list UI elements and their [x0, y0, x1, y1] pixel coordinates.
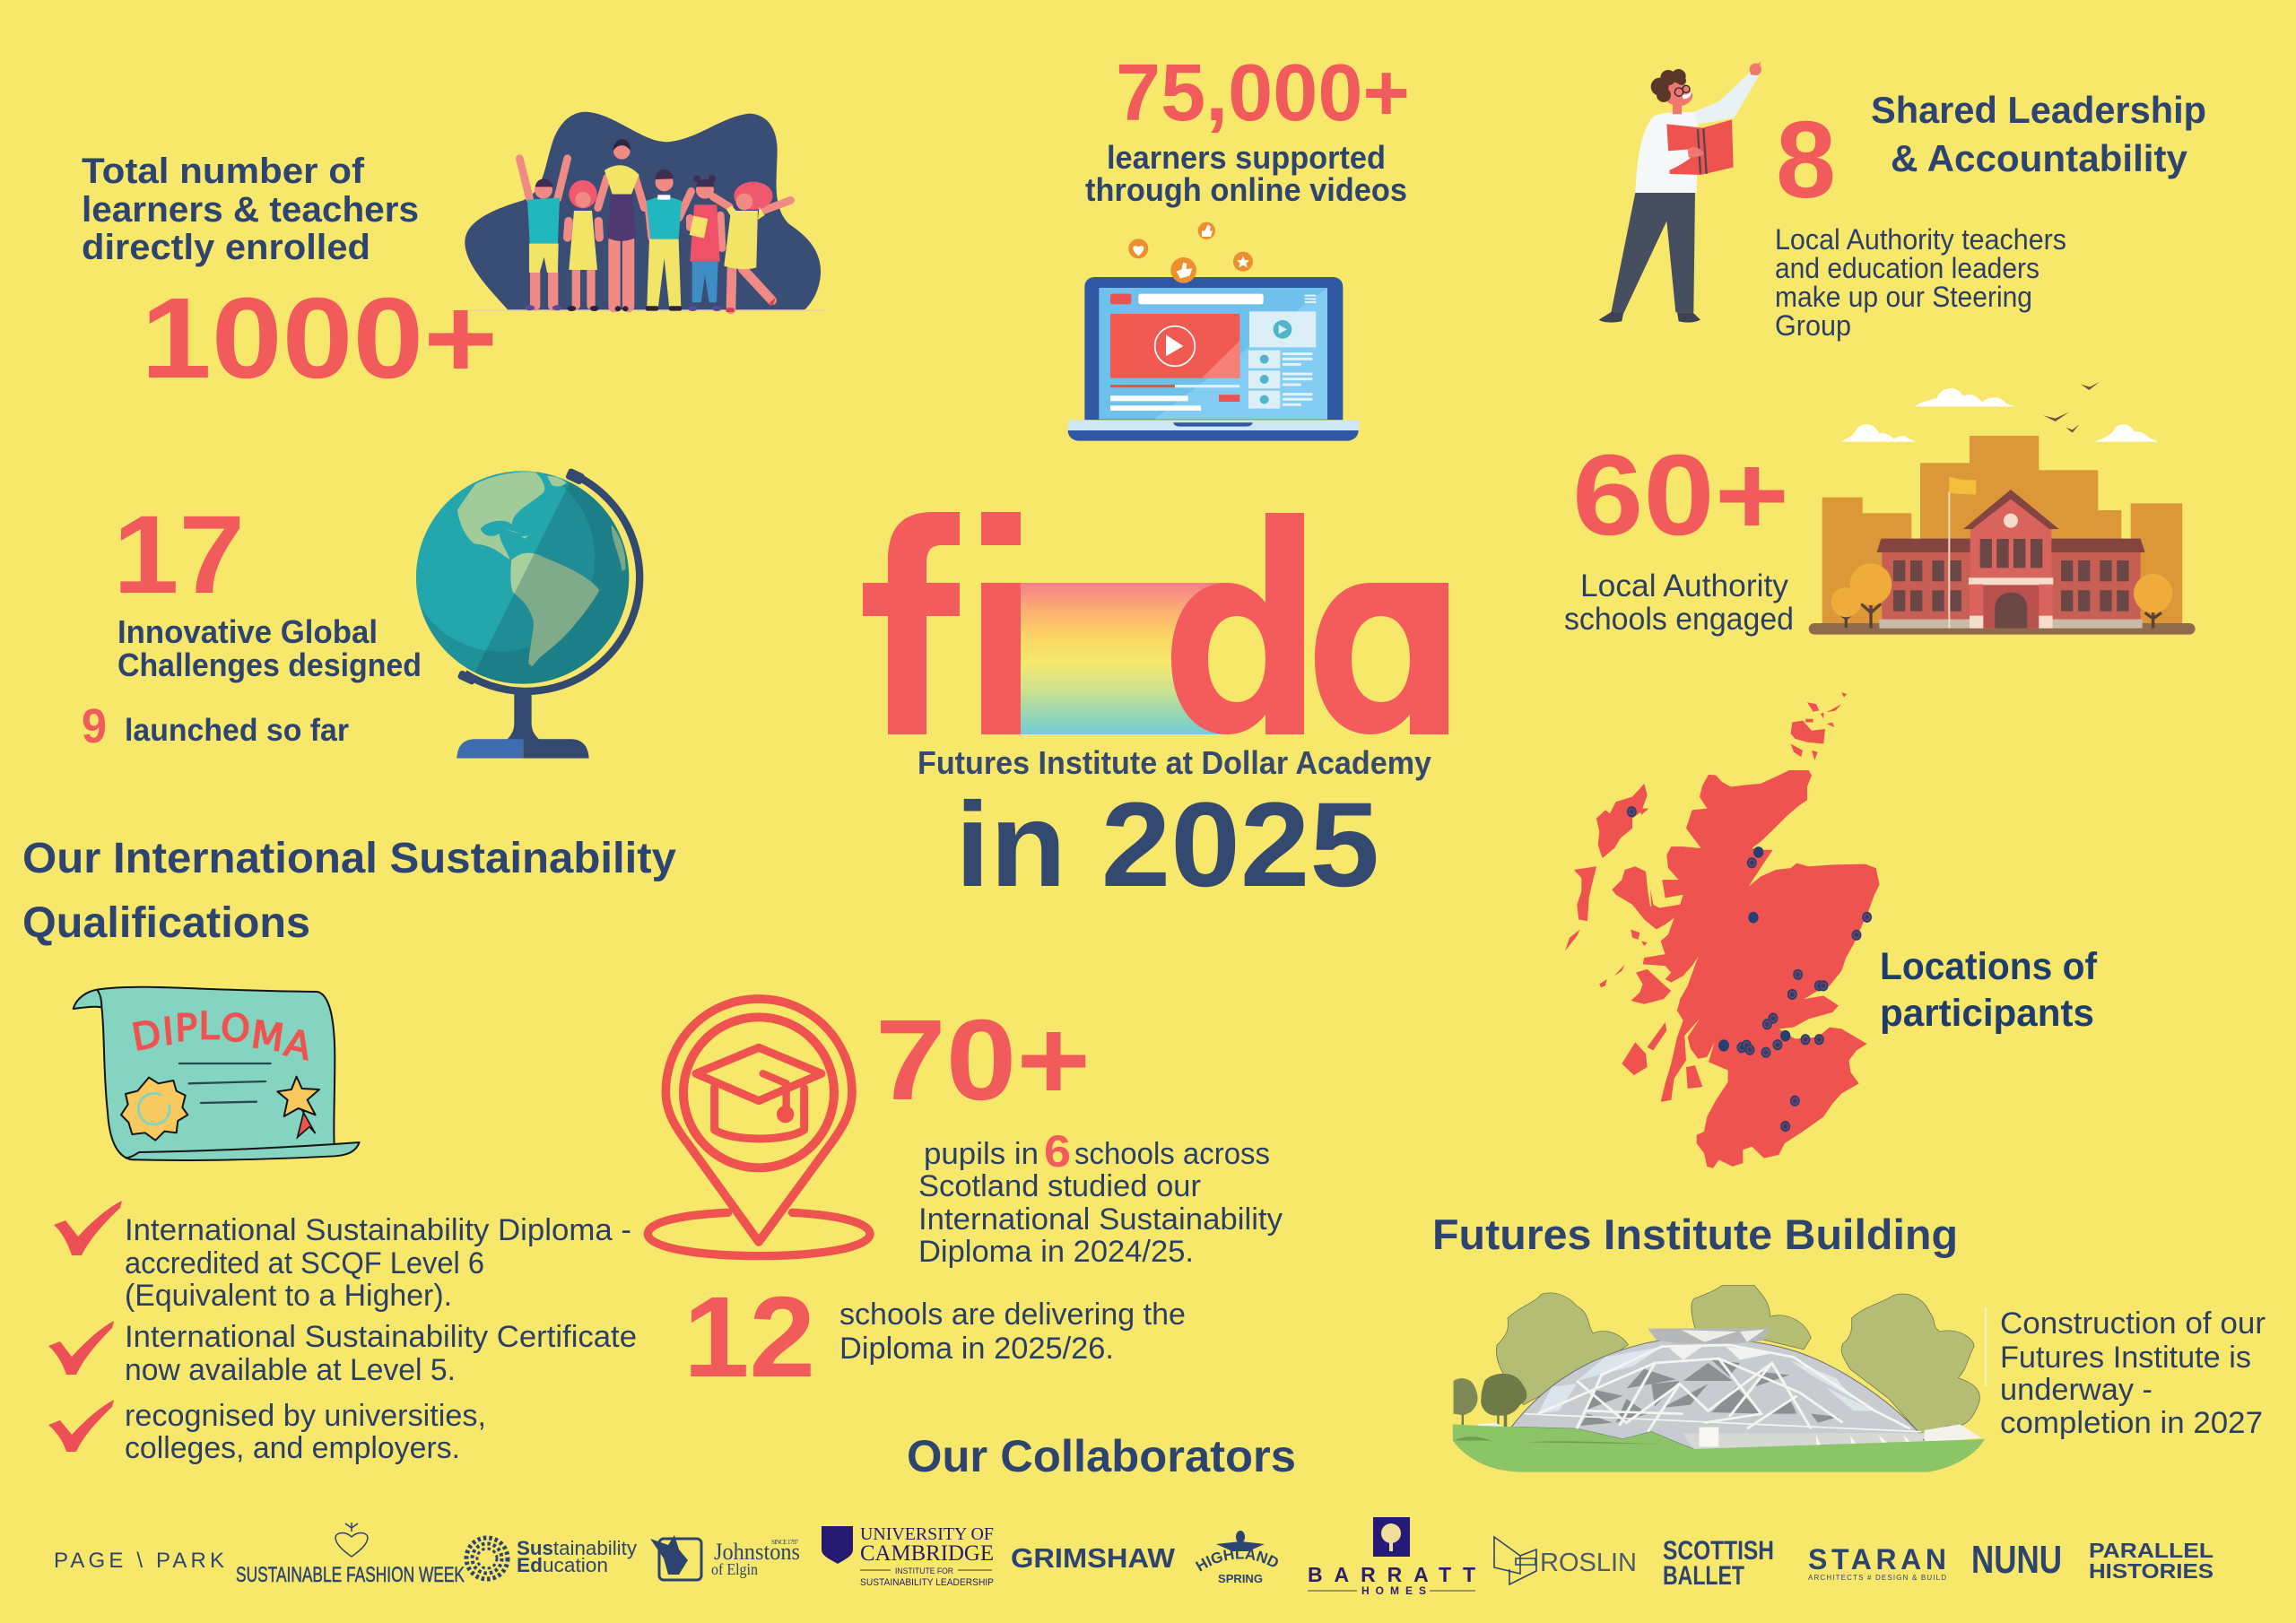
illustration: man pointing with red book [1599, 61, 1761, 323]
heading: international sustainability qualifications [22, 835, 676, 947]
title: in 2025: in 2025 [955, 778, 1379, 912]
stat: 70+ pupils: pupils in [924, 1137, 1039, 1171]
stat: 70+ pupils [875, 996, 1283, 1269]
logo: University of Cambridge Institute for Sustainability Leadership [822, 1524, 994, 1588]
logo: Sustainability Education: Sustainability [517, 1537, 637, 1559]
qualification 2 text [125, 1320, 637, 1387]
logo: Staran: ARCHITECTS # DESIGN & BUILD [1808, 1574, 1946, 1582]
qualification 1 text: accredited at SCQF Level 6 [125, 1246, 484, 1280]
illustration: desk globe [406, 457, 643, 759]
stat: 8 shared leadership and accountability: Shared Leadership [1871, 89, 2206, 131]
qualification 1 text: International Sustainability Diploma - [125, 1213, 631, 1247]
logo: University of Cambridge Institute for Sustainability Leadership: UNIVERSITY OF [860, 1524, 994, 1544]
stat: 17 global challenges: 9 [82, 699, 107, 753]
map label: locations of participants: Locations of [1880, 945, 2098, 988]
logo: Barratt Homes: HOMES [1361, 1584, 1426, 1597]
stat: 75,000+ learners supported [1085, 48, 1410, 208]
stat: 12 schools [683, 1273, 1186, 1402]
qualification 3 text: recognised by universities, [125, 1399, 486, 1433]
stat: 8 shared leadership and accountability: make up our Steering [1775, 281, 2032, 313]
stat: 8 shared leadership and accountability: Group [1775, 309, 1851, 342]
heading: international sustainability qualifications: Qualifications [22, 899, 310, 947]
check mark 2 [48, 1321, 114, 1375]
illustration: geodesic dome building [1453, 1285, 1985, 1472]
logo: Parallel Histories: HISTORIES [2089, 1559, 2213, 1583]
logo: University of Cambridge Institute for Sustainability Leadership: CAMBRIDGE [860, 1541, 994, 1566]
heading: futures institute building: Futures Institute Building [1432, 1211, 1958, 1258]
stat: total learners and teachers: Total number of [82, 152, 365, 191]
building caption: underway - [2000, 1373, 2152, 1407]
logo: Johnstons of Elgin: of Elgin [711, 1560, 758, 1578]
map label: locations of participants [1880, 945, 2098, 1035]
illustration: teacher and pupils [465, 112, 825, 312]
qualification 1 text: (Equivalent to a Higher). [125, 1279, 452, 1313]
building caption: Construction of our [2000, 1306, 2266, 1341]
stat: 17 global challenges: Challenges designed [117, 647, 422, 683]
heading: our collaborators: Our Collaborators [907, 1431, 1296, 1481]
logo: Highland Spring: HIGHLAND [1195, 1549, 1278, 1571]
stat: 8 shared leadership and accountability: 8 [1776, 99, 1836, 221]
stat: 70+ pupils: Diploma in 2024/25. [918, 1235, 1194, 1269]
stat: 17 global challenges: 17 [113, 493, 245, 617]
stat: 70+ pupils: 6 [1044, 1126, 1071, 1176]
stat: 60+ schools [1564, 431, 1794, 637]
logo: Roslin: ROSLIN [1540, 1549, 1637, 1577]
stat: 8 shared leadership and accountability [1775, 89, 2206, 342]
stat: 17 global challenges: Innovative Global [117, 613, 378, 650]
stat: 12 schools: 12 [683, 1273, 815, 1402]
stat: total learners and teachers [82, 152, 498, 403]
logo subtitle: Futures Institute at Dollar Academy [918, 744, 1431, 781]
divider beside building caption [1985, 1307, 1987, 1386]
stat: 60+ schools: Local Authority [1580, 568, 1788, 603]
icon: location pin with graduation cap [648, 999, 870, 1256]
illustration: diploma scroll [74, 987, 360, 1160]
stat: 17 global challenges [82, 493, 422, 753]
logo: Page Park: PAGE \ PARK [54, 1549, 224, 1573]
illustration: laptop playing video [1068, 222, 1359, 441]
logo: Grimshaw: GRIMSHAW [1011, 1542, 1176, 1574]
stat: 12 schools: Diploma in 2025/26. [839, 1332, 1114, 1366]
logo: Roslin [1494, 1537, 1637, 1584]
building caption: completion in 2027 [2000, 1406, 2263, 1440]
stat: 60+ schools: 60+ [1572, 431, 1789, 560]
check mark 3 [48, 1400, 114, 1452]
map: participant locations in Scotland [1565, 692, 1880, 1168]
qualification 3 text [125, 1399, 486, 1465]
stat: total learners and teachers: learners & teachers [82, 190, 419, 230]
logo: Sustainability Education [466, 1537, 637, 1579]
stat: 12 schools: schools are delivering the [839, 1298, 1186, 1332]
qualification 2 text: International Sustainability Certificate [125, 1320, 637, 1354]
stat: 8 shared leadership and accountability: Local Authority teachers [1775, 223, 2066, 256]
stat: 75,000+ learners supported: 75,000+ [1116, 48, 1410, 138]
logo: Staran: STARAN [1808, 1543, 1946, 1575]
logo: Scottish Ballet [1663, 1536, 1774, 1591]
stat: 60+ schools: schools engaged [1564, 602, 1794, 637]
logo: University of Cambridge Institute for Sustainability Leadership: SUSTAINABILITY LEADERSHIP [860, 1577, 994, 1588]
stat: 8 shared leadership and accountability: and education leaders [1775, 252, 2039, 284]
stat: total learners and teachers: directly enrolled [82, 228, 370, 267]
logo: Johnstons of Elgin: SINCE 1797 [771, 1539, 798, 1546]
heading: international sustainability qualifications: Our International Sustainability [22, 835, 676, 882]
logo: Barratt Homes: BARRATT [1308, 1563, 1475, 1586]
logo: Parallel Histories: PARALLEL [2089, 1539, 2213, 1562]
logo: Scottish Ballet: SCOTTISH [1663, 1536, 1774, 1566]
check mark 1 [54, 1201, 122, 1255]
logo: Highland Spring: SPRING [1218, 1572, 1263, 1585]
logo: Scottish Ballet: BALLET [1663, 1561, 1744, 1591]
logo: Barratt Homes [1308, 1517, 1475, 1597]
logo: Sustainability Education: Education [517, 1554, 608, 1576]
stat: 75,000+ learners supported: through online videos [1085, 171, 1407, 208]
stat: 8 shared leadership and accountability: & Accountability [1891, 137, 2188, 179]
qualification 2 text: now available at Level 5. [125, 1353, 456, 1387]
logo: Sustainable Fashion Week [236, 1523, 465, 1587]
stat: 70+ pupils: Scotland studied our [918, 1169, 1201, 1203]
logo: University of Cambridge Institute for Sustainability Leadership: INSTITUTE FOR [895, 1567, 953, 1575]
logo: Highland Spring [1195, 1531, 1278, 1585]
map label: locations of participants: participants [1880, 992, 2094, 1035]
logo: Sustainable Fashion Week: SUSTAINABLE FASHION WEEK [236, 1563, 465, 1587]
building caption [2000, 1306, 2266, 1440]
stat: total learners and teachers: 1000+ [141, 274, 498, 403]
building caption: Futures Institute is [2000, 1341, 2251, 1375]
stat: 17 global challenges: launched so far [125, 713, 349, 748]
central logo: fi da wordmark [863, 512, 1448, 734]
stat: 75,000+ learners supported: learners supported [1107, 139, 1386, 176]
stat: 70+ pupils: International Sustainability [918, 1202, 1283, 1237]
illustration: diploma scroll: DIPLOMA [128, 1003, 316, 1069]
stat: 70+ pupils: 70+ [875, 996, 1091, 1124]
stat: 70+ pupils: schools across [1074, 1137, 1270, 1171]
illustration: school building [1809, 382, 2196, 635]
qualification 3 text: colleges, and employers. [125, 1431, 460, 1465]
qualification 1 text [125, 1213, 631, 1313]
logo: Nunu: NUNU [1971, 1538, 2062, 1582]
logo: Johnstons of Elgin [650, 1535, 800, 1580]
logo: Parallel Histories [2089, 1539, 2213, 1583]
logo: Johnstons of Elgin: Johnstons [714, 1539, 800, 1565]
